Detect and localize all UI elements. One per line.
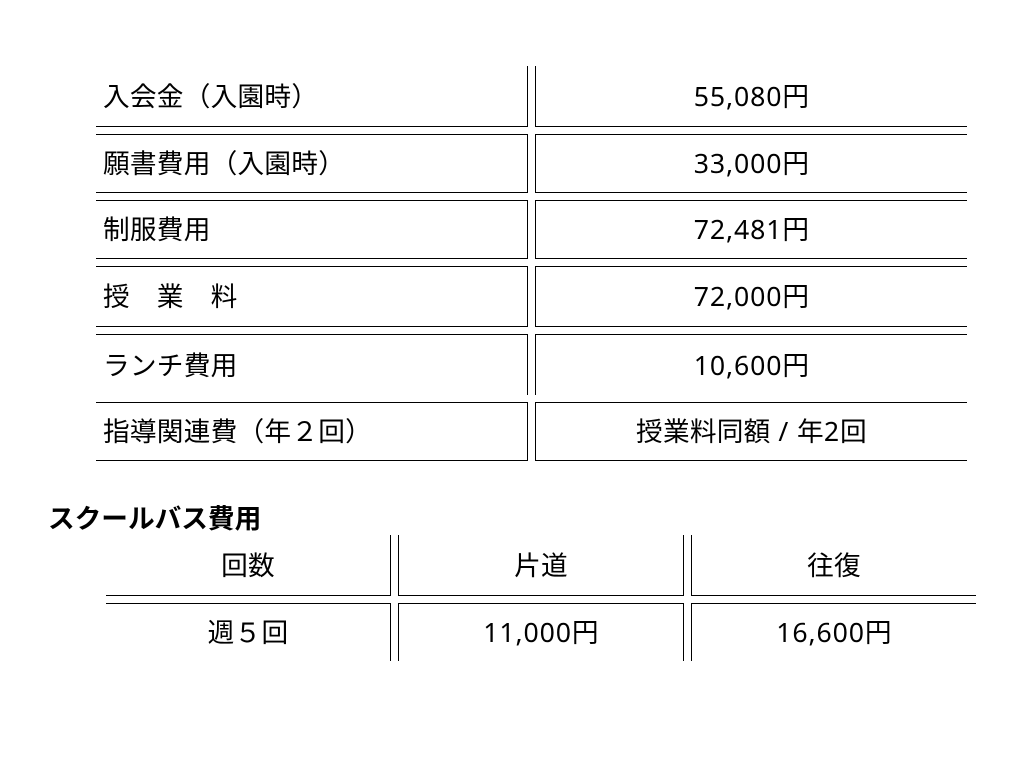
row label: guidance fee <box>96 402 528 461</box>
header: round trip <box>691 535 976 596</box>
cell: round trip price <box>691 603 976 661</box>
fee table <box>96 66 967 461</box>
row label: entrance fee <box>96 66 528 127</box>
row value: entrance fee: 55,080円 <box>694 77 809 114</box>
row label: application fee: 願書費用（入園時） <box>103 144 345 181</box>
row value: guidance fee: 授業料同額 / 年2回 <box>636 412 867 449</box>
header: one way: 片道 <box>514 546 568 583</box>
row label: uniform: 制服費用 <box>103 210 211 247</box>
row label: application fee <box>96 134 528 193</box>
cell: one way price <box>398 603 684 661</box>
row value: lunch <box>535 334 967 395</box>
cell: five times a week: 週５回 <box>208 613 288 650</box>
row label: lunch <box>96 334 528 395</box>
row value: tuition: 72,000円 <box>694 277 809 314</box>
header: one way <box>398 535 684 596</box>
row value: guidance fee <box>535 402 967 461</box>
row label: lunch: ランチ費用 <box>103 346 238 383</box>
header: count <box>106 535 391 596</box>
heading: school bus fee: スクールバス費用 <box>48 499 261 536</box>
row value: uniform: 72,481円 <box>694 210 809 247</box>
bus fee table <box>106 535 976 661</box>
row value: application fee <box>535 134 967 193</box>
row label: entrance fee: 入会金（入園時） <box>103 77 318 114</box>
cell: round trip price: 16,600円 <box>776 613 892 650</box>
header: round trip: 往復 <box>807 546 861 583</box>
row value: application fee: 33,000円 <box>694 144 809 181</box>
row value: lunch: 10,600円 <box>694 346 809 383</box>
row label: uniform <box>96 200 528 259</box>
row value: tuition <box>535 266 967 327</box>
header: count: 回数 <box>221 546 275 583</box>
row value: uniform <box>535 200 967 259</box>
row label: tuition <box>96 266 528 327</box>
row value: entrance fee <box>535 66 967 127</box>
row label: tuition: 授 業 料 <box>103 277 238 314</box>
cell: one way price: 11,000円 <box>483 613 599 650</box>
cell: five times a week <box>106 603 391 661</box>
row label: guidance fee: 指導関連費（年２回） <box>103 412 372 449</box>
